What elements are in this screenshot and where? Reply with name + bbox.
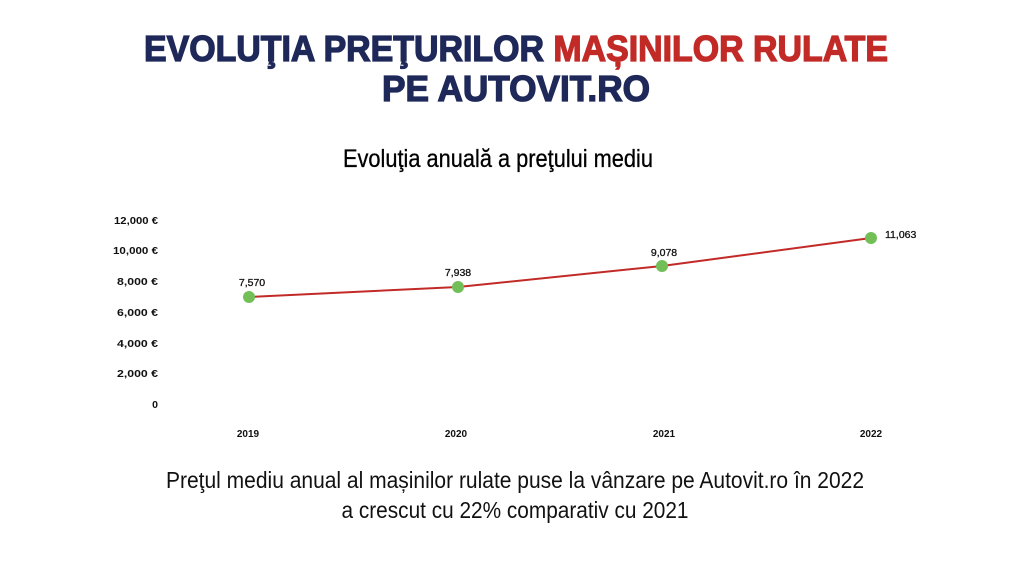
data labels: 11,063 (885, 229, 916, 241)
chart heading: Evoluţia anuală a preţului mediu (343, 145, 653, 173)
summary text: a crescut cu 22% comparativ cu 2021 (342, 497, 688, 523)
title: PE AUTOVIT.RO (382, 68, 650, 109)
title (144, 28, 888, 109)
y axis labels: 12,000 € (114, 215, 158, 227)
x axis labels (237, 429, 883, 440)
data labels (239, 229, 916, 289)
y axis labels: 6,000 € (117, 307, 158, 319)
x axis labels: 2019 (237, 429, 260, 440)
data labels: 9,078 (651, 247, 677, 259)
y axis labels: 2,000 € (117, 368, 158, 380)
price line (249, 238, 871, 297)
line chart (113, 215, 916, 440)
summary text: Preţul mediu anual al mașinilor rulate puse la vânzare pe Autovit.ro în 2022 (166, 467, 864, 493)
summary text (166, 467, 864, 523)
title: EVOLUŢIA PREŢURILOR MAȘINILOR RULATE (144, 28, 888, 69)
y axis labels: 8,000 € (117, 276, 158, 288)
data labels: 7,570 (239, 277, 265, 289)
y axis labels: 10,000 € (113, 245, 158, 257)
x axis labels: 2020 (445, 429, 468, 440)
data points (243, 232, 877, 303)
x axis labels: 2021 (653, 429, 676, 440)
y axis labels: 4,000 € (117, 338, 158, 350)
y axis labels (113, 215, 158, 411)
data labels: 7,938 (445, 267, 471, 279)
y axis labels: 0 (152, 399, 158, 411)
x axis labels: 2022 (860, 429, 883, 440)
